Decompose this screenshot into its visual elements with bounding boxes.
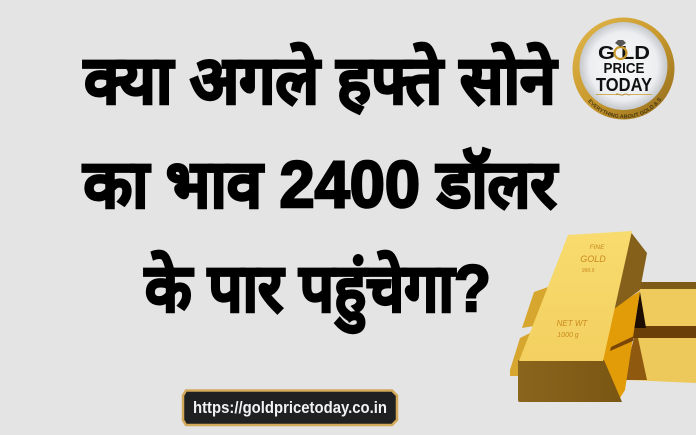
logo text: PRICE	[604, 61, 645, 77]
logo tagline	[586, 99, 662, 118]
title line 3: के पार पहुंचेगा?	[145, 251, 491, 325]
main bar right side	[610, 231, 647, 312]
bar engraving: 1000 g	[557, 332, 579, 339]
dark edge stroke	[610, 336, 634, 351]
bar engraving: GOLD	[580, 254, 606, 264]
gold bars	[510, 231, 696, 402]
logo text: G LD	[598, 43, 650, 63]
bar engraving: FINE	[590, 244, 605, 251]
logo text: TODAY	[596, 75, 652, 95]
bar engraving: NET WT	[557, 319, 588, 328]
title	[81, 42, 560, 334]
logo text	[596, 40, 652, 95]
right stacked bars	[623, 282, 696, 383]
bar engraving	[557, 244, 606, 339]
back left bars	[510, 287, 548, 376]
url badge	[182, 389, 398, 426]
bar engraving: 999.9	[582, 268, 594, 274]
title line 1: क्या अगले हफ्ते सोने	[84, 43, 556, 117]
title line 2: का भाव 2400 डॉलर	[84, 147, 556, 221]
main bar top face	[519, 231, 632, 361]
main bar front face	[518, 360, 622, 402]
side glow face	[602, 291, 640, 398]
